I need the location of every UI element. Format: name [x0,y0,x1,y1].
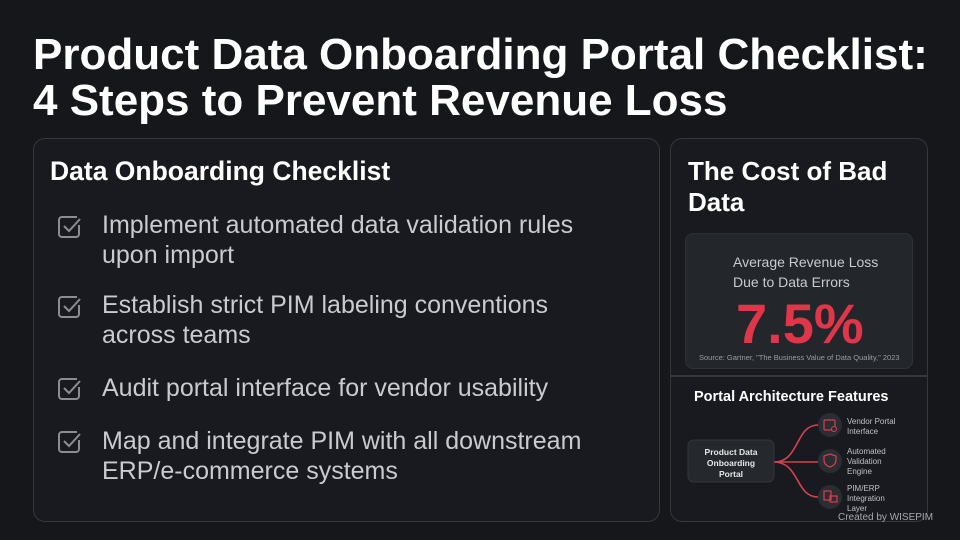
title: Product Data Onboarding Portal Checklist: [33,30,928,79]
text: item 4: Map and integrate PIM with all downstream [102,427,581,455]
divider line [671,375,927,377]
panel: checklist [33,138,660,522]
label: integration: Layer [847,504,867,513]
text: item 1 [102,211,573,269]
text: item 2: across teams [102,321,251,349]
node: portal: Onboarding [707,458,755,468]
label: integration: Integration [847,494,885,503]
source: Source: Gartner, "The Business Value of Data Quality," 2023 [699,353,900,362]
heading: architecture: Portal Architecture Features [694,389,888,405]
heading: cost [688,156,887,217]
label: validation engine [847,447,886,476]
stat label [733,254,878,290]
label: integration: PIM/ERP [847,484,880,493]
title: 4 Steps to Prevent Revenue Loss [33,76,727,125]
title [33,30,928,125]
label: vendor portal: Vendor Portal [847,417,895,426]
icon: vendor portal [818,413,842,437]
connectors [774,425,818,497]
text: item 2 [102,291,548,349]
watermark: Created by WISEPIM [838,512,933,523]
heading: cost: The Cost of Bad [688,156,887,186]
text: item 3: Audit portal interface for vendor usability [102,374,548,402]
text: item 1: upon import [102,241,234,269]
label: validation engine: Validation [847,457,882,466]
text: item 4: ERP/e-commerce systems [102,457,398,485]
heading: checklist: Data Onboarding Checklist [50,156,390,186]
node: portal: Portal [719,469,743,479]
icon: validation [818,449,842,473]
label: integration [847,484,885,513]
node: portal: Product Data [705,447,758,457]
text: item 2: Establish strict PIM labeling conventions [102,291,548,319]
stat label: Due to Data Errors [733,274,850,290]
node: portal [688,440,774,482]
label: vendor portal [847,417,895,436]
text: item 4 [102,427,581,485]
icon: checkbox 4 [58,431,81,453]
label: validation engine: Automated [847,447,886,456]
icon: checkbox 2 [58,296,81,318]
label: vendor portal: Interface [847,427,878,436]
diagram: architecture [688,413,842,509]
panel: cost of bad data [670,138,928,522]
label: validation engine: Engine [847,467,872,476]
checklist items [58,211,581,485]
icon: checkbox 3 [58,378,81,400]
icon: integration [818,485,842,509]
icon: checkbox 1 [58,216,81,238]
stat label: Average Revenue Loss [733,254,878,270]
text: item 1: Implement automated data validation rules [102,211,573,239]
stat card [685,233,913,369]
stat value: 7.5% [736,292,864,355]
heading: cost: Data [688,187,744,217]
